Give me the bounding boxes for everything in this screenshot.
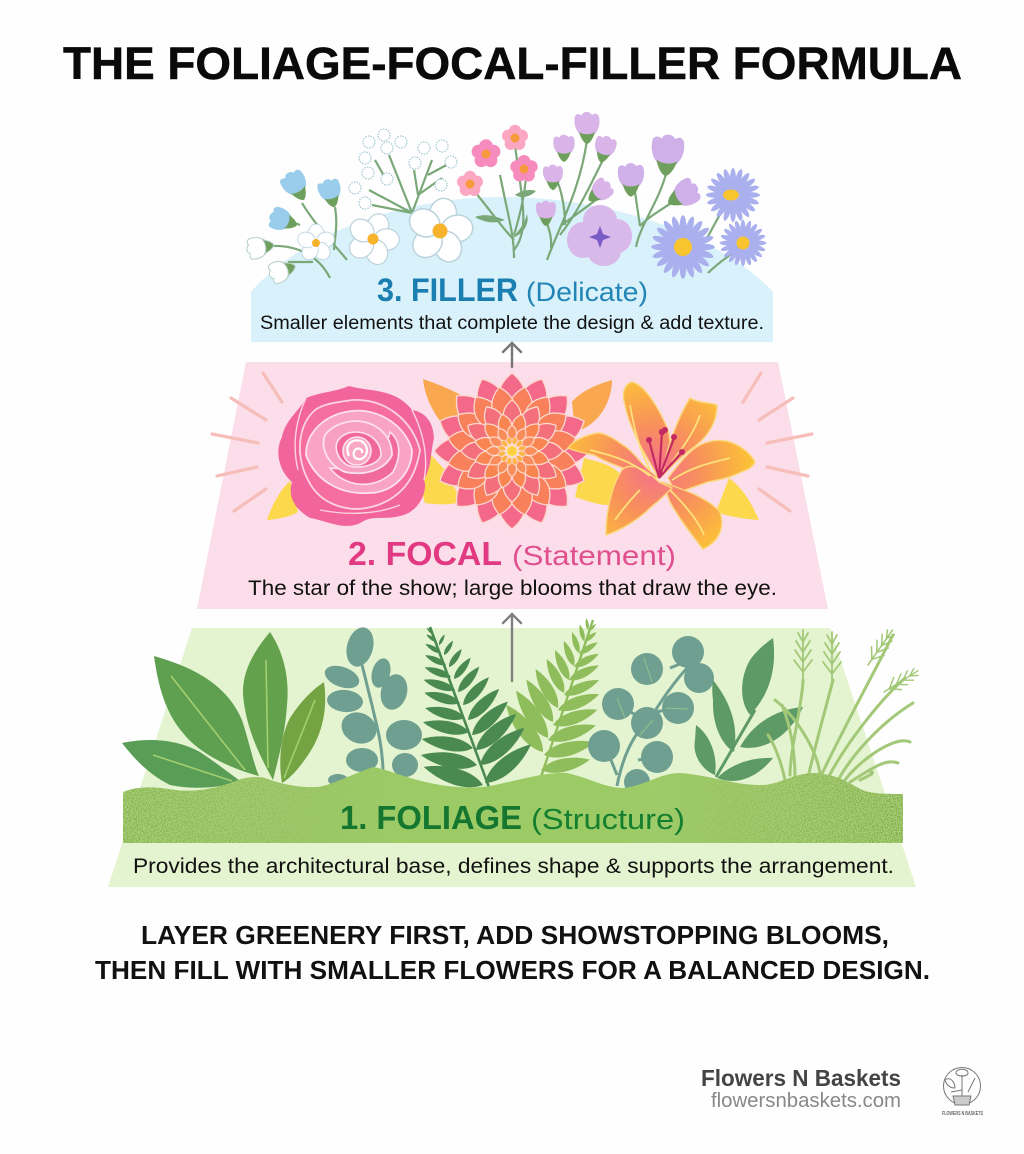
panel: filler tier: [245, 112, 776, 342]
moss speckle texture: [123, 773, 903, 843]
filler heading: [377, 272, 648, 308]
periwinkle asters: [638, 157, 776, 292]
summary statement: LAYER GREENERY FIRST, ADD SHOWSTOPPING BLOOMS,: [141, 920, 889, 950]
dark green fern: [420, 627, 536, 793]
lily: [568, 382, 755, 549]
burst rays: [212, 373, 812, 511]
foliage heading: (Structure): [531, 804, 685, 836]
large mauve flower: [567, 205, 632, 266]
panel: foliage tier: [108, 618, 922, 887]
focal heading: [348, 535, 676, 572]
blue buds: [266, 167, 345, 236]
logo: [942, 1068, 983, 1117]
ornamental grass: [768, 626, 922, 782]
gypsophila dots: [349, 129, 457, 209]
background leaves: [267, 379, 759, 520]
focal heading: (Statement): [512, 540, 676, 571]
stems: [272, 140, 734, 278]
foliage panel background: [108, 628, 916, 887]
focal description: The star of the show; large blooms that draw the eye.: [248, 577, 777, 600]
filler description: Smaller elements that complete the design & add texture.: [260, 313, 764, 334]
foliage heading: [340, 799, 685, 836]
rose: [278, 386, 434, 526]
dahlia: [402, 341, 622, 561]
logo emblem: [944, 1068, 980, 1105]
brand url: flowersnbaskets.com: [711, 1090, 901, 1112]
teal eucalyptus sprig: [322, 624, 422, 786]
focal heading: 2. FOCAL: [348, 535, 502, 572]
pink blossoms: [457, 125, 538, 196]
title: THE FOLIAGE-FOCAL-FILLER FORMULA: [63, 38, 962, 89]
summary statement: [95, 920, 930, 985]
white buds: [245, 234, 299, 285]
light green fern: [500, 618, 601, 780]
arrow: foliage to focal: [503, 614, 521, 681]
focal panel background: [197, 362, 828, 609]
round-leaf eucalyptus: [588, 636, 714, 795]
broad green leaves: [122, 632, 325, 788]
moss mound: [123, 767, 903, 843]
white daisies: [296, 192, 481, 275]
crocus buds: [618, 133, 704, 215]
filler panel background: [251, 197, 773, 342]
green leaves: [475, 190, 536, 238]
brand name: Flowers N Baskets: [701, 1065, 901, 1091]
logo caption: FLOWERS N BASKETS: [942, 1111, 983, 1117]
filler heading: (Delicate): [526, 277, 648, 307]
leafy green stem: [694, 638, 803, 781]
foliage heading: 1. FOLIAGE: [340, 799, 522, 836]
filler heading: 3. FILLER: [377, 272, 518, 308]
foliage description: Provides the architectural base, defines shape & supports the arrangement.: [133, 855, 894, 878]
summary statement: THEN FILL WITH SMALLER FLOWERS FOR A BALANCED DESIGN.: [95, 955, 930, 985]
mauve buds: [536, 112, 618, 226]
arrow: filler to focal: [503, 343, 521, 367]
panel: focal tier: [197, 341, 828, 609]
